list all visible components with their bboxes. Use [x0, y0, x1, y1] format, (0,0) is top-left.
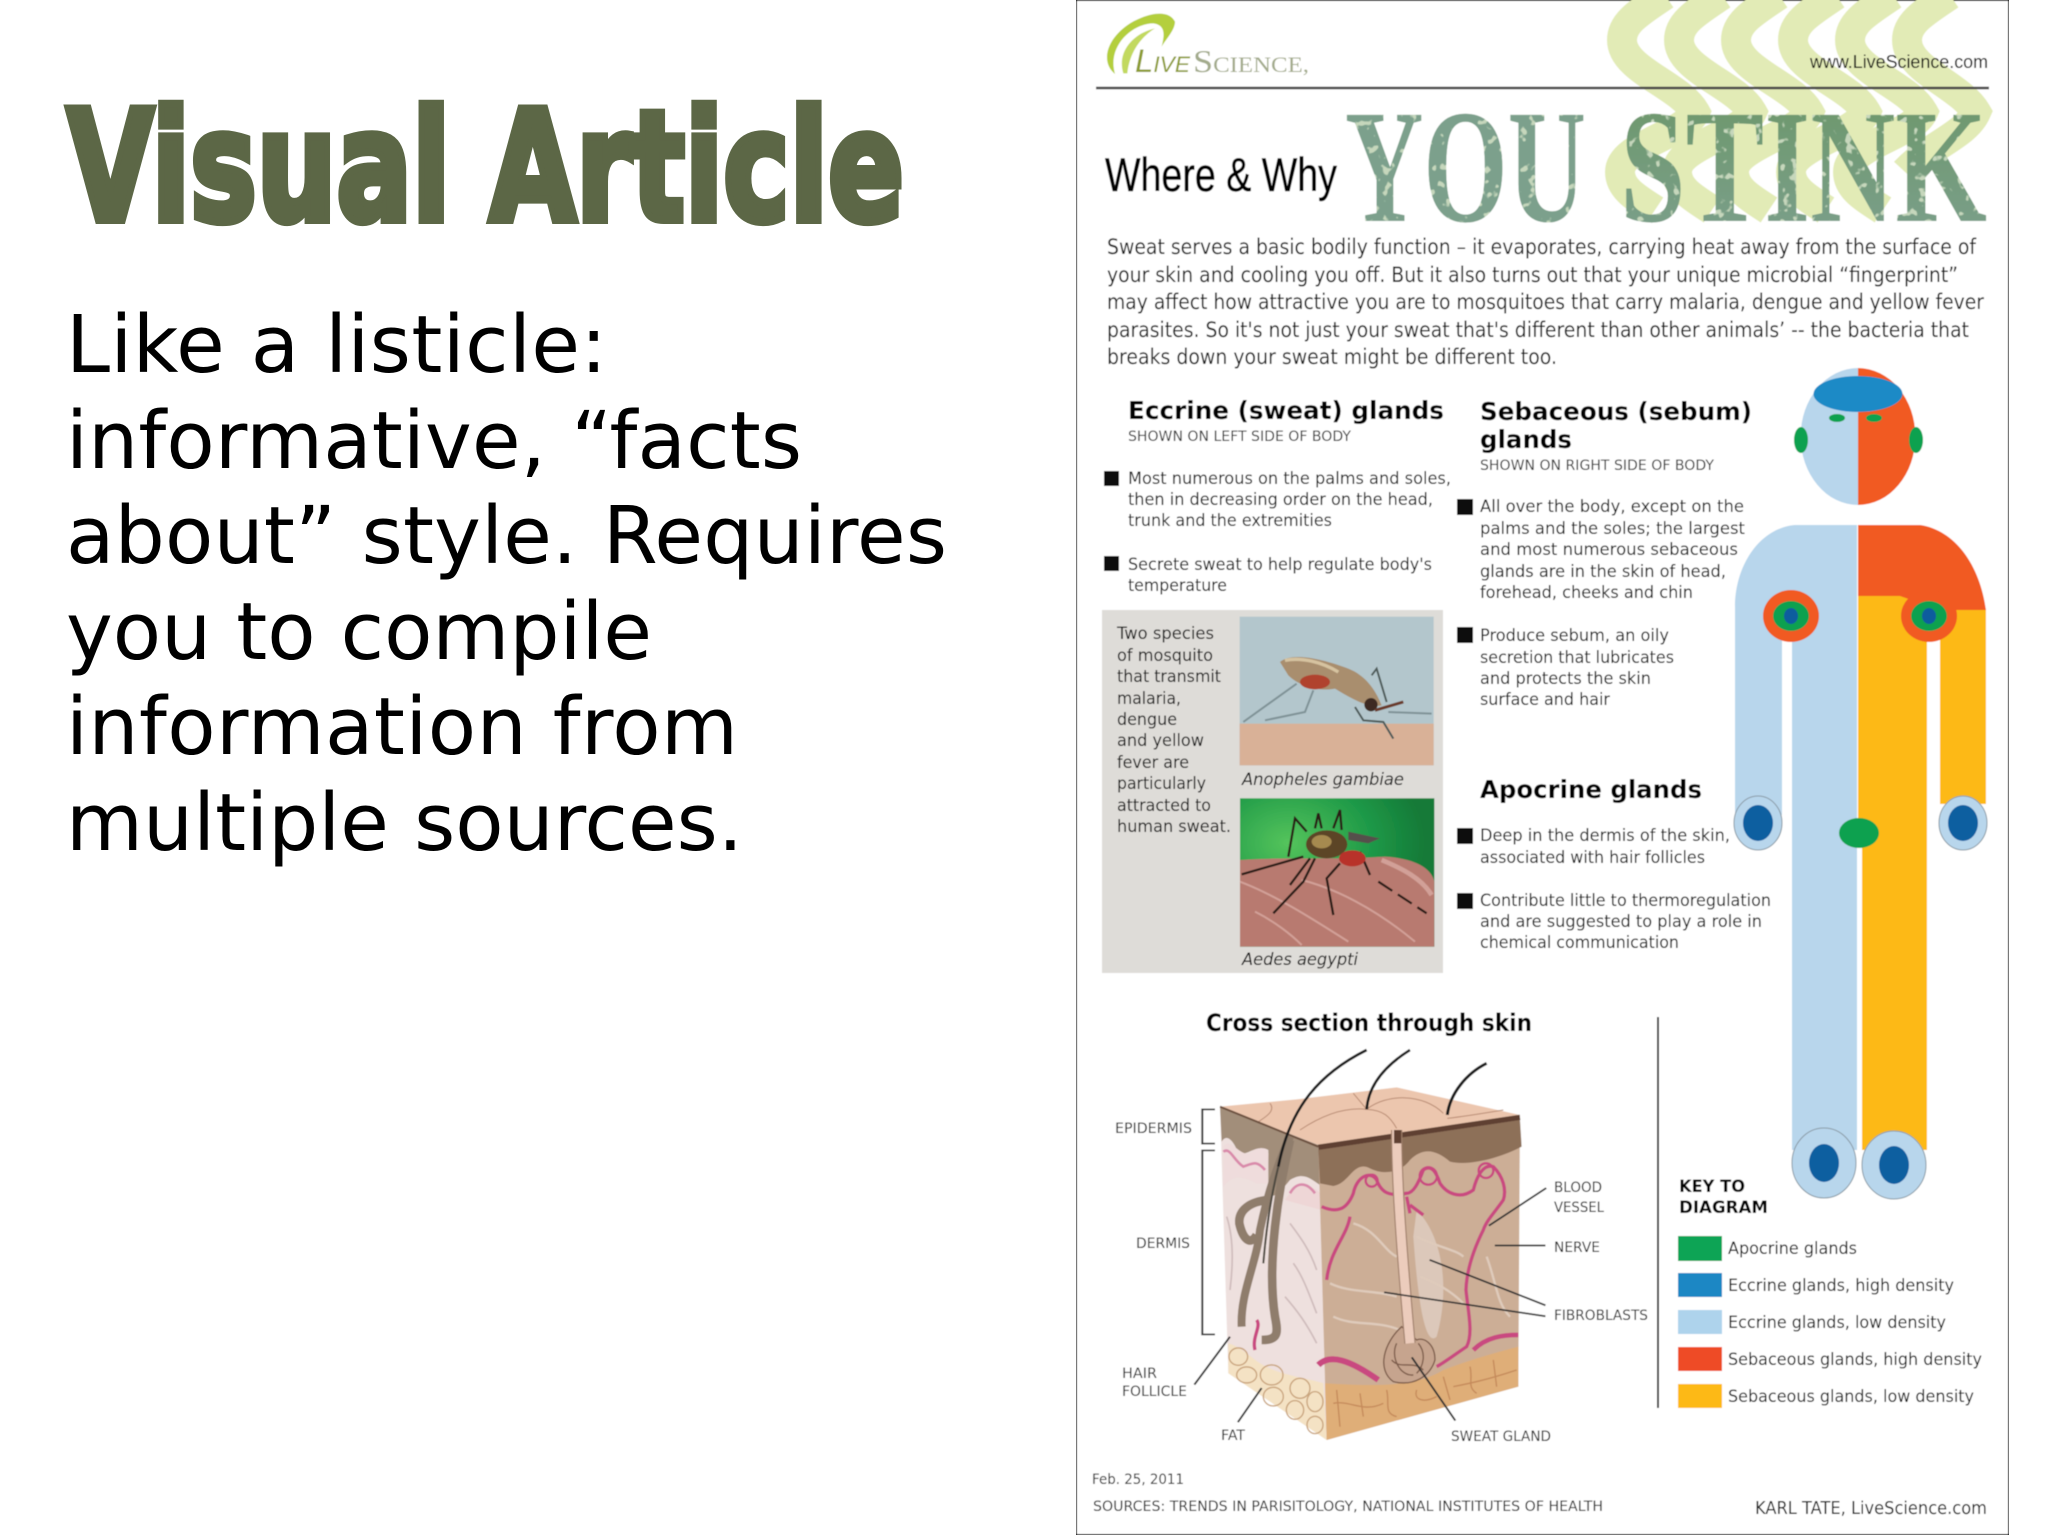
blood vessels — [1223, 1151, 1518, 1380]
legend: key to diagram: KEY TO — [1679, 1177, 1745, 1197]
section: sebaceous glands: forehead, cheeks and chin — [1480, 583, 1693, 603]
section: sebaceous glands: and protects the skin — [1480, 669, 1651, 689]
section: apocrine glands: associated with hair follicles — [1480, 848, 1705, 868]
section: sebaceous glands — [1457, 397, 1752, 710]
sidebar text: malaria, — [1117, 689, 1181, 709]
sidebar text: fever are — [1117, 753, 1189, 773]
skin diagram labels: DERMIS — [1136, 1236, 1190, 1252]
slide body text: multiple sources. — [66, 777, 743, 869]
section: eccrine glands: trunk and the extremities — [1128, 511, 1332, 531]
credit: KARL TATE, LiveScience.com — [1755, 1498, 1987, 1519]
sidebar text: attracted to — [1117, 796, 1211, 816]
skin diagram labels: VESSEL — [1554, 1200, 1604, 1216]
sweat duct and gland — [1384, 1130, 1435, 1383]
left hand — [1734, 796, 1782, 850]
section: apocrine glands: chemical communication — [1480, 933, 1679, 953]
headline prefix: Where & Why — [1105, 148, 1337, 201]
groin gland — [1839, 818, 1879, 848]
right face of skin block — [1220, 1107, 1522, 1440]
left armpit glands — [1763, 590, 1819, 642]
panel: mosquito sidebar — [1102, 610, 1443, 973]
section: apocrine glands: Contribute little to thermoregulation — [1480, 891, 1771, 911]
section: apocrine glands: Deep in the dermis of the skin, — [1480, 826, 1730, 846]
skin diagram labels — [1115, 1121, 1648, 1445]
cross section heading: Cross section through skin — [1206, 1009, 1532, 1037]
sidebar text: Two species — [1116, 624, 1214, 644]
section: eccrine glands: Eccrine (sweat) glands — [1128, 396, 1444, 425]
section: eccrine glands: SHOWN ON LEFT SIDE OF BODY — [1128, 429, 1351, 445]
skin diagram labels: EPIDERMIS — [1115, 1121, 1192, 1137]
skin diagram labels: FIBROBLASTS — [1554, 1308, 1648, 1324]
section: eccrine glands: Secrete sweat to help regulate body's — [1128, 555, 1432, 575]
brackets and leader lines — [1194, 1109, 1546, 1422]
section: eccrine glands: then in decreasing order on the head, — [1128, 490, 1433, 510]
sources: SOURCES: TRENDS IN PARISITOLOGY, NATIONAL INSTITUTES OF HEALTH — [1093, 1499, 1603, 1515]
legend: key to diagram — [1678, 1177, 1982, 1408]
intro paragraph: your skin and cooling you off. But it also turns out that your unique microbial “fingerprint” — [1107, 263, 1958, 287]
skin cross-section illustration — [1220, 1050, 1522, 1440]
section: apocrine glands — [1457, 775, 1771, 953]
stink wave stripes — [1620, 0, 1976, 210]
LiveScience logo: SCIENCE, — [1193, 43, 1309, 79]
headline YOU STINK — [1345, 78, 1987, 257]
skin diagram labels: NERVE — [1554, 1240, 1600, 1256]
legend: key to diagram: Eccrine glands, low density — [1728, 1313, 1946, 1333]
headline YOU STINK: YOU — [1345, 78, 1586, 257]
sidebar text: and yellow — [1117, 731, 1204, 751]
section: eccrine glands: Most numerous on the palms and soles, — [1128, 469, 1451, 489]
legend: key to diagram: Apocrine glands — [1728, 1239, 1857, 1259]
legend: key to diagram: Sebaceous glands, low density — [1728, 1387, 1974, 1407]
section: apocrine glands: Apocrine glands — [1480, 775, 1702, 804]
slide body text: about” style. Requires — [66, 490, 947, 582]
sidebar text: dengue — [1117, 710, 1177, 730]
legend: key to diagram: Sebaceous glands, high density — [1728, 1350, 1982, 1370]
right armpit glands — [1901, 590, 1957, 642]
LiveScience logo — [1107, 14, 1309, 79]
section: sebaceous glands: Produce sebum, an oily — [1480, 626, 1669, 646]
skin diagram labels: FOLLICLE — [1122, 1384, 1187, 1400]
slide title: Visual Article — [67, 79, 904, 257]
section: sebaceous glands: and most numerous sebaceous — [1480, 540, 1738, 560]
top skin surface — [1220, 1087, 1520, 1145]
skin diagram labels: BLOOD — [1554, 1180, 1602, 1196]
hair follicle and hair — [1239, 1050, 1487, 1340]
slide body text — [66, 299, 947, 869]
fat layers — [1228, 1343, 1518, 1440]
right body half: sebaceous low density — [1858, 596, 1986, 1150]
sidebar text — [1116, 624, 1231, 837]
slide body text: you to compile — [66, 586, 652, 678]
section: sebaceous glands: Sebaceous (sebum) — [1480, 397, 1752, 426]
infographic panel — [1076, 0, 2009, 1535]
intro paragraph — [1107, 235, 1984, 369]
body diagram — [1734, 368, 1987, 1199]
slide body text: information from — [66, 681, 738, 773]
sidebar text: particularly — [1117, 774, 1206, 794]
sidebar text: that transmit — [1117, 667, 1221, 687]
right foot — [1862, 1131, 1926, 1199]
left foot — [1792, 1128, 1856, 1198]
section: sebaceous glands: palms and the soles; the largest — [1480, 519, 1745, 539]
date: Feb. 25, 2011 — [1092, 1472, 1184, 1488]
section: sebaceous glands: surface and hair — [1480, 690, 1610, 710]
sidebar text: human sweat. — [1117, 817, 1231, 837]
section: sebaceous glands: secretion that lubricates — [1480, 648, 1674, 668]
skin diagram labels: SWEAT GLAND — [1451, 1429, 1551, 1445]
LiveScience logo: LIVE — [1135, 43, 1190, 79]
slide body text: informative, “facts — [66, 395, 802, 487]
caption: Aedes aegypti: Aedes aegypti — [1241, 950, 1358, 970]
website URL: www.LiveScience.com — [1809, 52, 1988, 72]
right hand — [1939, 796, 1987, 850]
section: apocrine glands: and are suggested to play a role in — [1480, 912, 1762, 932]
section: eccrine glands: temperature — [1128, 576, 1227, 596]
skin diagram labels: FAT — [1221, 1428, 1245, 1444]
section: sebaceous glands: glands are in the skin of head, — [1480, 562, 1726, 582]
intro paragraph: breaks down your sweat might be different too. — [1107, 345, 1557, 369]
photo: Aedes aegypti — [1240, 798, 1434, 947]
skin diagram labels: HAIR — [1122, 1366, 1157, 1382]
sidebar text: of mosquito — [1117, 646, 1213, 666]
right shoulder: sebaceous high density — [1858, 525, 1986, 610]
section: sebaceous glands: glands — [1480, 425, 1572, 454]
head — [1794, 368, 1923, 505]
left face of skin block — [1220, 1107, 1327, 1440]
intro paragraph: parasites. So it's not just your sweat that's different than other animals’ -- the bacteria that — [1107, 318, 1969, 342]
legend: key to diagram: Eccrine glands, high density — [1728, 1276, 1954, 1296]
caption: Anopheles gambiae: Anopheles gambiae — [1241, 770, 1404, 790]
photo: Anopheles gambiae — [1240, 617, 1434, 765]
left body half: eccrine — [1735, 525, 1857, 1150]
section: eccrine glands — [1104, 396, 1451, 596]
legend: key to diagram: DIAGRAM — [1679, 1198, 1768, 1218]
section: sebaceous glands: SHOWN ON RIGHT SIDE OF BODY — [1480, 458, 1714, 474]
slide body text: Like a listicle: — [66, 299, 607, 391]
section: sebaceous glands: All over the body, except on the — [1480, 497, 1744, 517]
intro paragraph: Sweat serves a basic bodily function – it evaporates, carrying heat away from the surface of — [1107, 235, 1977, 259]
